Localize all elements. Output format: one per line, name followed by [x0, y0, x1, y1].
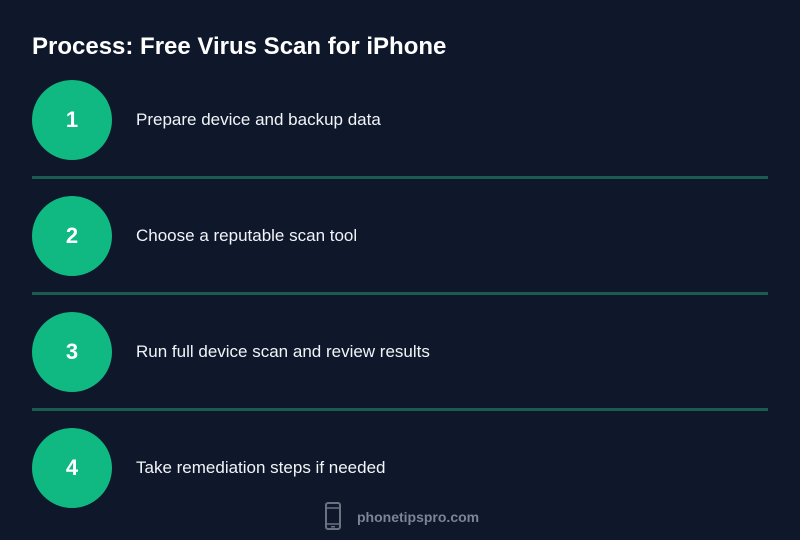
step 1 circle	[32, 80, 112, 160]
step 4 label: Take remediation steps if needed	[136, 458, 386, 477]
title: Process: Free Virus Scan for iPhone	[32, 33, 446, 60]
step 3 circle: 3	[66, 339, 78, 364]
step 1 label: Prepare device and backup data	[136, 110, 381, 129]
step 3 circle	[32, 312, 112, 392]
footer text: phonetipspro.com	[357, 509, 479, 525]
step 4 circle	[32, 428, 112, 508]
step 1 circle: 1	[66, 107, 78, 132]
step 2 label: Choose a reputable scan tool	[136, 226, 357, 245]
icon: phone	[325, 502, 341, 530]
step 2 circle: 2	[66, 223, 78, 248]
step 2 circle	[32, 196, 112, 276]
step 3 label: Run full device scan and review results	[136, 342, 430, 361]
step 4 circle: 4	[66, 455, 78, 480]
footer brand	[325, 502, 479, 530]
